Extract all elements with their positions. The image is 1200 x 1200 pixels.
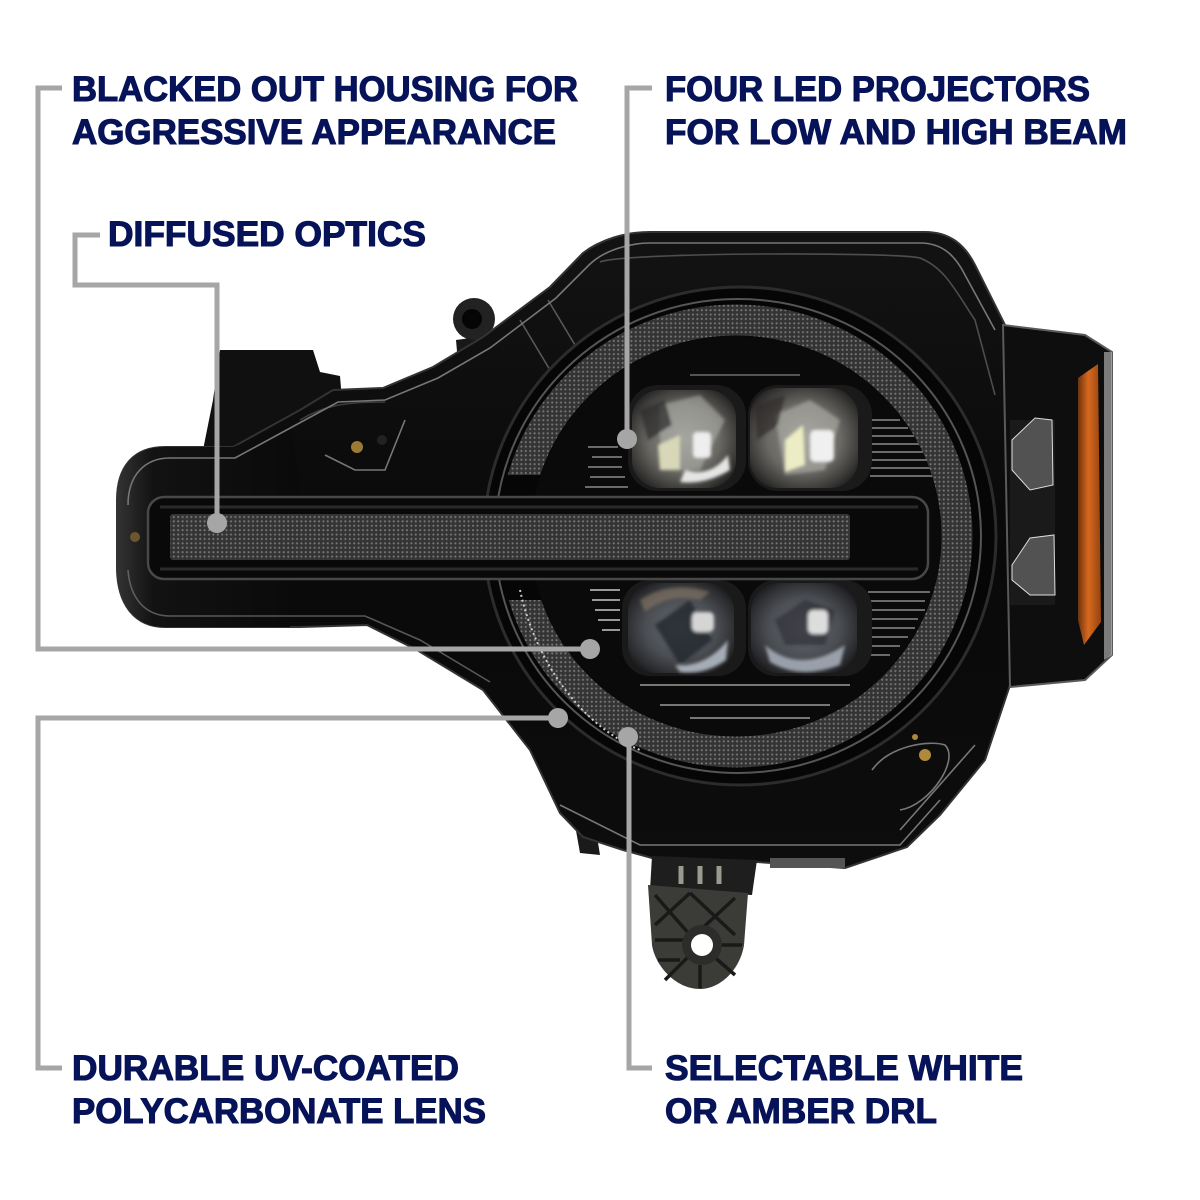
projector lens top right — [748, 385, 872, 491]
diffused light bar — [170, 514, 850, 560]
headlight assembly — [117, 232, 1112, 989]
projector lens bottom left — [622, 580, 746, 676]
wiring connector block — [203, 350, 342, 450]
amber side marker housing — [1003, 325, 1112, 687]
clear upper clip — [1012, 418, 1053, 490]
label: blacked out housing: BLACKED OUT HOUSING FOR — [72, 70, 578, 109]
callout: polycarbonate lens — [38, 708, 568, 1131]
clear lower clip — [1012, 535, 1055, 595]
heat fins — [585, 375, 935, 718]
label: LED projectors: FOR LOW AND HIGH BEAM — [665, 113, 1127, 152]
inner projector bowl — [531, 336, 941, 736]
light bar inner frame — [160, 507, 918, 569]
label: polycarbonate lens: POLYCARBONATE LENS — [72, 1092, 486, 1131]
housing body — [117, 232, 1010, 868]
light bar frame — [148, 497, 928, 579]
left nose section — [117, 425, 300, 627]
lens edge highlights — [128, 243, 995, 845]
amber reflector — [1078, 364, 1101, 645]
dark bezel ring — [484, 287, 996, 785]
mounting screws — [130, 435, 931, 761]
callout: selectable DRL — [618, 727, 1023, 1131]
projector lens bottom right — [748, 580, 872, 676]
callout: LED projectors — [617, 70, 1127, 449]
label: polycarbonate lens: DURABLE UV-COATED — [72, 1049, 459, 1088]
grommet vent — [453, 298, 495, 385]
label: selectable DRL: SELECTABLE WHITE — [665, 1049, 1023, 1088]
leveling bracket neck — [650, 856, 757, 895]
bottom left tab — [575, 825, 600, 855]
bottom ribs — [770, 858, 845, 868]
DRL halo ring — [515, 320, 957, 752]
callout: diffused optics — [75, 215, 426, 533]
projector lens top left — [628, 385, 746, 491]
halo bright edge — [520, 590, 640, 750]
label: selectable DRL: OR AMBER DRL — [665, 1092, 937, 1131]
callout: blacked out housing — [38, 70, 600, 659]
label: diffused optics: DIFFUSED OPTICS — [108, 215, 426, 254]
bracket hole — [691, 934, 713, 956]
mounting bracket — [648, 885, 748, 989]
bracket strips — [681, 866, 719, 884]
label: blacked out housing: AGGRESSIVE APPEARANCE — [72, 113, 556, 152]
label: LED projectors: FOUR LED PROJECTORS — [665, 70, 1090, 109]
outer chrome arc — [495, 299, 981, 773]
